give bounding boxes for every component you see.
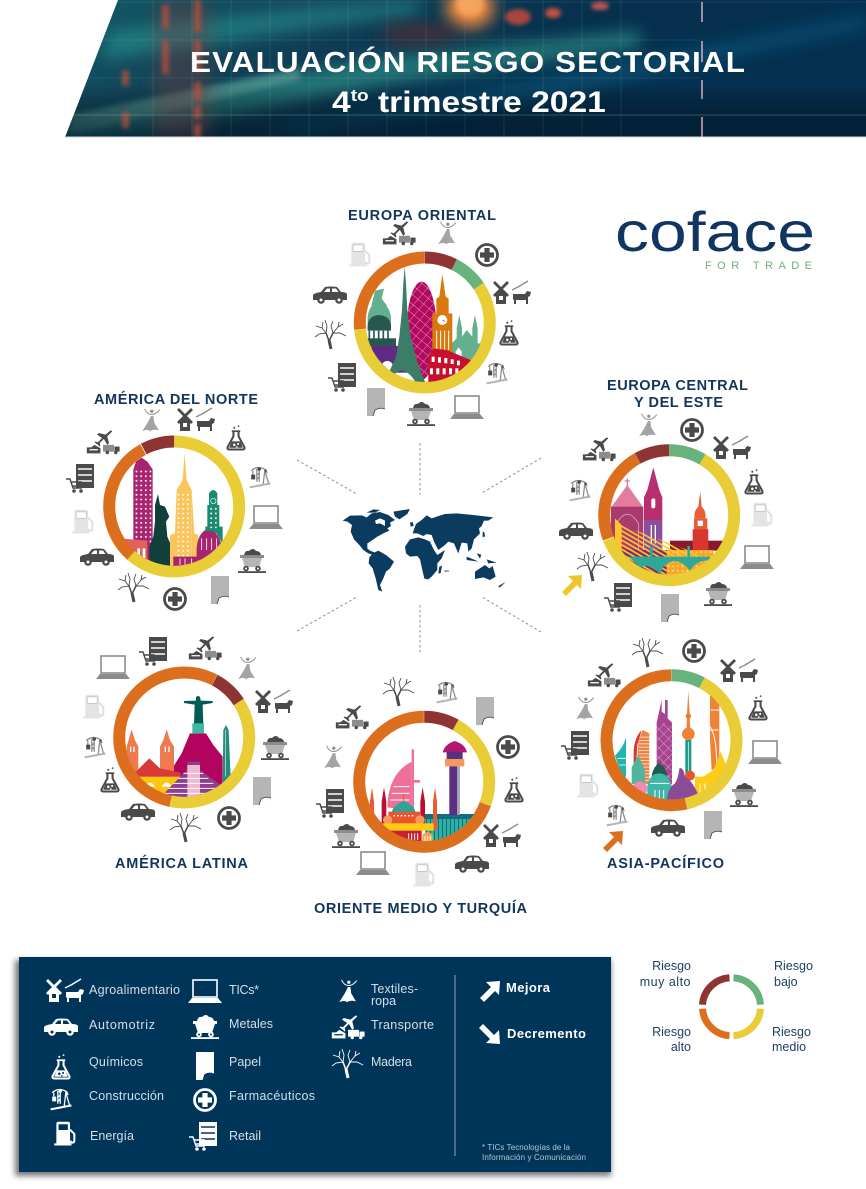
legend item: Farmacéuticos — [194, 1089, 315, 1110]
region: América del Norte — [66, 391, 283, 610]
footnote — [482, 1143, 586, 1162]
icon: ICT — [249, 506, 283, 529]
legend item: Agroalimentario — [47, 979, 180, 1002]
heading: América del Norte: AMÉRICA DEL NORTE — [94, 391, 258, 408]
ring: risk shares — [335, 232, 515, 413]
label: Riesgo muy alto — [640, 959, 691, 989]
icon: chemicals — [101, 767, 119, 791]
heading: Europa Oriental: EUROPA ORIENTAL — [348, 208, 496, 224]
logo: coface: coface — [615, 200, 815, 263]
city skyline: Oriente Medio — [370, 741, 474, 842]
icon: retail — [328, 363, 356, 392]
icon: wood — [118, 573, 149, 602]
city skyline: Asia-Pacífico — [615, 691, 727, 800]
city skyline: América Latina — [127, 696, 231, 798]
icon: retail — [66, 464, 94, 493]
region: América Latina — [83, 636, 293, 872]
icon: transport — [383, 221, 416, 245]
icon: automotive — [80, 548, 114, 566]
icon: pharma — [164, 588, 186, 610]
icon: construction — [570, 480, 590, 500]
icon: retail — [604, 583, 632, 612]
label: Riesgo alto: Riesgo — [652, 1025, 691, 1039]
legend item: Madera: Madera — [371, 1055, 412, 1069]
subtitle: to — [351, 86, 369, 105]
icon: pharma — [498, 736, 518, 758]
icon: paper — [367, 388, 385, 416]
icon: paper — [211, 576, 229, 604]
legend item: Químicos — [52, 1054, 143, 1078]
legend item: Metales: Metales — [229, 1017, 273, 1031]
icon: pharma — [684, 640, 704, 662]
panel: sector legend — [15, 957, 611, 1176]
icon: agrifood — [714, 436, 751, 459]
legend item: Farmacéuticos: Farmacéuticos — [229, 1089, 315, 1103]
icon: retail — [316, 789, 344, 818]
legend item: Retail: Retail — [229, 1129, 261, 1143]
icon: energy — [349, 243, 369, 267]
icon: paper — [661, 594, 679, 622]
legend item: Transporte: Transporte — [371, 1018, 434, 1032]
label: Riesgo bajo — [774, 959, 813, 989]
legend item: Mejora arrow: Mejora — [506, 980, 551, 995]
legend item: Automotriz — [44, 1018, 155, 1036]
heading: Asia-Pacífico: ASIA-PACÍFICO — [607, 855, 724, 872]
icon: agrifood — [256, 690, 293, 713]
icon: ICT — [450, 396, 484, 419]
legend item: Decremento arrow: Decremento — [507, 1026, 586, 1041]
icon: textile — [438, 222, 456, 244]
ring: risk shares — [82, 415, 266, 598]
legend item: Decremento arrow — [479, 1024, 586, 1044]
city skyline: Europa Central — [611, 468, 723, 574]
banner with title — [60, 0, 866, 150]
icon: chemicals — [505, 777, 523, 801]
icon: transport — [189, 636, 222, 660]
heading: Europa Central y del Este: EUROPA CENTRAL — [607, 378, 748, 394]
legend item: Madera — [332, 1049, 412, 1078]
icon: energy — [413, 863, 433, 887]
icon: wood — [170, 813, 201, 842]
legend item: Papel: Papel — [229, 1055, 261, 1069]
icon: metals — [730, 783, 758, 807]
risk level legend — [640, 959, 813, 1054]
icon: wood — [577, 552, 608, 581]
icon: energy — [83, 695, 103, 719]
label: Riesgo alto — [652, 1025, 691, 1054]
icon: paper — [704, 811, 722, 839]
icon: metals — [332, 824, 360, 848]
icon: textile — [238, 657, 256, 679]
legend item: Mejora arrow — [480, 980, 551, 1002]
region: Asia-Pacífico — [561, 638, 782, 872]
icon: retail — [139, 637, 167, 666]
label: Riesgo bajo: Riesgo — [774, 959, 813, 973]
footnote: * TICs Tecnologías de la — [482, 1143, 571, 1152]
region: Oriente Medio y Turquía — [314, 677, 528, 917]
title: EVALUACIÓN RIESGO SECTORIAL — [190, 45, 746, 79]
icon: agrifood — [484, 824, 521, 847]
city skyline: Europa Oriental — [365, 267, 483, 383]
donut key — [702, 978, 760, 1036]
icon: wood — [383, 677, 414, 706]
logo: coface: FOR TRADE — [705, 260, 812, 272]
icon: pharma — [682, 420, 702, 440]
icon: ICT — [748, 741, 782, 764]
legend item: Construcción — [51, 1089, 164, 1109]
ring: risk shares — [94, 648, 274, 827]
icon: agrifood — [721, 659, 758, 682]
legend item: Papel — [196, 1052, 261, 1080]
legend item: TICs: TICs* — [229, 983, 259, 997]
legend item: Textiles-ropa — [339, 980, 418, 1008]
label: Riesgo medio: Riesgo — [772, 1025, 811, 1039]
icon: automotive — [651, 820, 685, 837]
label: Riesgo medio — [772, 1025, 811, 1054]
legend item: Textiles-ropa: ropa — [371, 994, 396, 1008]
heading: Europa Central y del Este — [607, 378, 748, 411]
icon: ICT — [740, 546, 774, 569]
legend item: Agroalimentario: Agroalimentario — [89, 983, 180, 997]
icon: automotive — [559, 522, 593, 540]
legend item: Retail — [189, 1122, 261, 1151]
icon: construction — [85, 737, 105, 757]
label: Riesgo muy alto: muy alto — [640, 975, 691, 989]
icon: transport — [87, 430, 120, 454]
icon: chemicals — [749, 695, 767, 719]
heading: Oriente Medio y Turquía: ORIENTE MEDIO Y TURQUÍA — [314, 900, 528, 917]
icon: wood — [315, 320, 346, 349]
icon: textile — [576, 697, 594, 719]
icon: pharma — [218, 808, 240, 828]
legend item: Construcción: Construcción — [89, 1089, 164, 1103]
icon: construction — [607, 805, 627, 825]
icon: energy — [577, 774, 597, 798]
world map — [343, 509, 506, 592]
icon: construction — [250, 467, 270, 487]
arrow: improving wood — [562, 575, 582, 596]
connector lines — [297, 443, 541, 655]
legend item: Transporte — [332, 1015, 434, 1039]
icon: textile — [639, 414, 657, 436]
icon: retail — [561, 731, 589, 760]
icon: chemicals — [745, 469, 763, 493]
subtitle: trimestre 2021 — [369, 85, 606, 119]
icon: textile — [142, 409, 160, 431]
icon: ICT — [96, 656, 130, 679]
heading: Europa Central y del Este: Y DEL ESTE — [634, 395, 723, 411]
icon: chemicals — [227, 425, 245, 449]
icon: construction — [487, 363, 507, 383]
icon: metals — [704, 582, 732, 606]
ring: risk shares — [584, 652, 759, 828]
icon: metals — [238, 549, 266, 573]
icon: transport — [588, 663, 621, 687]
icon: automotive — [313, 286, 347, 304]
legend item: Energía: Energía — [90, 1129, 134, 1143]
label: Riesgo alto: alto — [671, 1040, 691, 1054]
legend item: TICs — [188, 980, 259, 1003]
icon: chemicals — [500, 320, 518, 344]
heading: América Latina: AMÉRICA LATINA — [115, 855, 249, 872]
label: Riesgo muy alto: Riesgo — [652, 959, 691, 973]
banner background image — [60, 0, 866, 150]
icon: textile — [324, 746, 342, 768]
icon: construction — [437, 682, 457, 702]
city skyline: América del Norte — [118, 453, 224, 567]
icon: agrifood — [178, 408, 215, 431]
legend item: Metales — [191, 1015, 273, 1039]
icon: metals — [407, 402, 435, 426]
region: Europa Central y del Este — [559, 378, 774, 622]
icon: metals — [261, 736, 289, 760]
icon: paper — [253, 777, 271, 805]
icon: energy — [751, 503, 771, 527]
icon: automotive — [121, 804, 155, 821]
ring: risk shares — [580, 426, 758, 604]
icon: automotive — [455, 856, 489, 873]
region: Europa Oriental — [313, 208, 531, 426]
icon: agrifood — [494, 281, 531, 304]
icon: wood — [632, 638, 663, 667]
legend item: Automotriz: Automotriz — [89, 1018, 155, 1032]
icon: transport — [336, 705, 369, 729]
icon: paper — [476, 697, 494, 725]
label: Riesgo bajo: bajo — [774, 975, 798, 989]
arrow: improving construction — [603, 831, 623, 852]
icon: transport — [583, 437, 616, 461]
icon: pharma — [476, 244, 498, 266]
icon: ICT — [356, 852, 390, 875]
legend item: Textiles-ropa: Textiles- — [371, 982, 418, 996]
subtitle: 4 — [332, 85, 351, 119]
ring: risk shares — [336, 693, 513, 870]
icon: energy — [72, 510, 92, 534]
label: Riesgo medio: medio — [772, 1040, 806, 1054]
legend item: Químicos: Químicos — [89, 1055, 143, 1069]
legend item: Energía — [54, 1122, 134, 1146]
footnote: Información y Comunicación — [482, 1153, 586, 1162]
